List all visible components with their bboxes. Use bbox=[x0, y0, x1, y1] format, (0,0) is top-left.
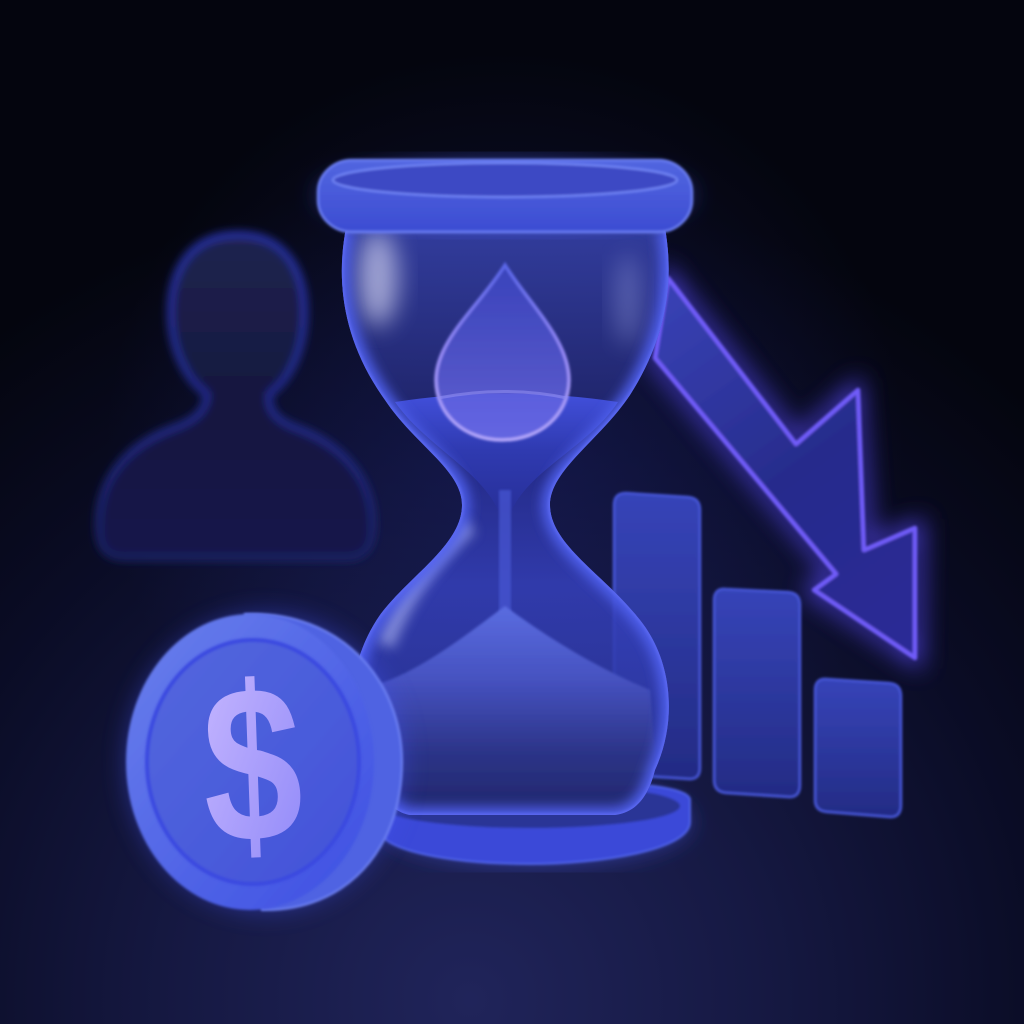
bar 3 bbox=[815, 679, 901, 817]
icon: dollar coin bbox=[125, 612, 405, 912]
icon: water drop bbox=[436, 265, 569, 440]
icon: falling arrow bbox=[655, 278, 917, 658]
top rim bbox=[317, 159, 693, 232]
bar 1 bbox=[614, 493, 700, 779]
glass body bbox=[342, 228, 669, 815]
dollar sign: $ bbox=[199, 638, 306, 890]
bar 2 bbox=[714, 589, 800, 797]
top sand bbox=[395, 394, 618, 615]
bar chart bbox=[614, 493, 901, 817]
bottom sand bbox=[382, 606, 652, 808]
base plate bbox=[380, 780, 690, 864]
glass highlights bbox=[342, 228, 669, 815]
hourglass bbox=[317, 159, 693, 864]
icon: blurred person silhouette bbox=[98, 234, 373, 558]
